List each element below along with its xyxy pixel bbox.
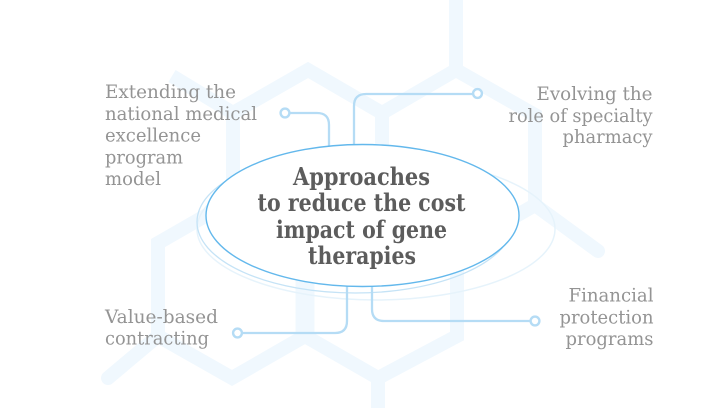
heading: [258, 162, 466, 270]
label: financial protection programs: protection: [560, 308, 654, 328]
label: extending national medical excellence program model: [105, 82, 257, 190]
background: molecular hexagon pattern: [108, 0, 598, 408]
heading: to reduce the cost: [258, 188, 466, 217]
label: extending national medical excellence program model: excellence: [105, 126, 201, 146]
outer decorative ellipses: [197, 151, 555, 300]
label: extending national medical excellence program model: program: [105, 148, 183, 168]
label: extending national medical excellence program model: Extending the: [105, 82, 236, 103]
label: value-based contracting: Value-based: [104, 307, 218, 328]
label: evolving role of specialty pharmacy: Evolving the: [536, 84, 653, 105]
label: value-based contracting: [104, 307, 218, 350]
label: extending national medical excellence program model: national medical: [105, 104, 257, 125]
label: financial protection programs: programs: [566, 329, 654, 350]
connector: value-based contracting: [233, 285, 347, 337]
central ellipse: [206, 144, 519, 286]
heading: Approaches: [292, 162, 430, 191]
connector: specialty pharmacy: [354, 89, 482, 146]
label: financial protection programs: [560, 286, 654, 350]
label: evolving role of specialty pharmacy: pharmacy: [562, 127, 653, 148]
connector: national medical excellence: [281, 109, 329, 147]
label: value-based contracting: contracting: [105, 328, 209, 350]
label: evolving role of specialty pharmacy: role of specialty: [508, 106, 653, 127]
label: financial protection programs: Financial: [568, 286, 654, 306]
connector: financial protection: [372, 285, 539, 325]
label: evolving role of specialty pharmacy: [508, 84, 653, 148]
label: extending national medical excellence program model: model: [105, 169, 161, 190]
heading: therapies: [308, 241, 416, 270]
heading: impact of gene: [276, 215, 447, 244]
